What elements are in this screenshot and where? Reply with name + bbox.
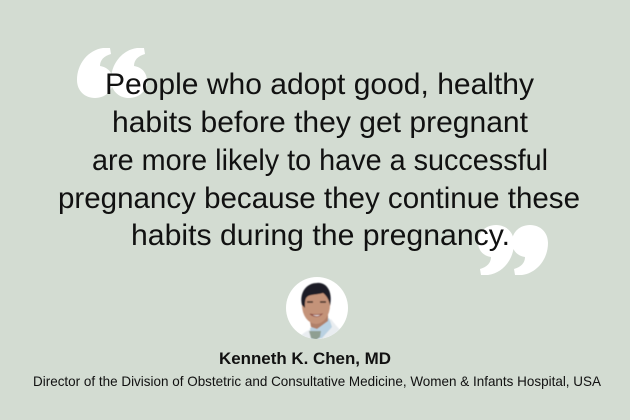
face bbox=[301, 292, 330, 324]
hair bbox=[301, 283, 331, 308]
neck bbox=[309, 314, 328, 329]
quote text: habits during the pregnancy. bbox=[131, 219, 510, 252]
portrait photo bbox=[286, 277, 348, 345]
tie bbox=[309, 331, 321, 340]
shirt bbox=[310, 318, 332, 340]
eyes and mouth bbox=[307, 301, 326, 303]
name: Kenneth K. Chen, MD bbox=[219, 349, 391, 368]
quote text: pregnancy because they continue these bbox=[58, 182, 580, 215]
quote text: are more likely to have a successful bbox=[92, 144, 548, 177]
quote card bbox=[34, 48, 601, 389]
quote text bbox=[58, 68, 580, 252]
job title: Director of the Division of Obstetric and Consultative Medicine, Women & Infants Hospital, USA bbox=[33, 373, 602, 389]
icon: opening quotation mark bbox=[77, 48, 147, 98]
coat bbox=[302, 319, 340, 338]
icon: closing quotation mark bbox=[478, 225, 548, 275]
quote text: habits before they get pregnant bbox=[112, 106, 529, 139]
quote text: People who adopt good, healthy bbox=[105, 68, 534, 101]
